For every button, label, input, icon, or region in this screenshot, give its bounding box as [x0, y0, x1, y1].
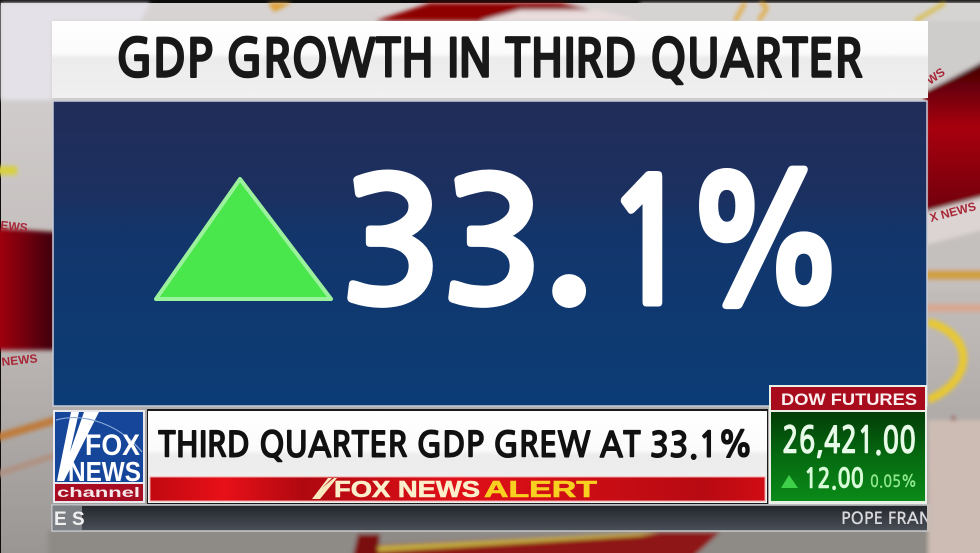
studio signage [0, 65, 978, 369]
banner headline: THIRD QUARTER GDP GREW AT 33.1% [158, 429, 753, 463]
fox news channel logo: channel [57, 484, 140, 500]
headline figure: 3 [339, 159, 445, 330]
fox news channel logo: NEWS [68, 456, 141, 487]
studio signage: WS [924, 65, 948, 87]
dow values: 26,421.00 [782, 422, 916, 459]
fox news alert strip [150, 476, 765, 502]
dow values [771, 412, 925, 501]
title panel [52, 21, 928, 98]
dow values: 12.00 [804, 466, 864, 493]
main blue panel [53, 101, 927, 406]
title text: GDP GROWTH IN THIRD QUARTER [116, 32, 863, 85]
dow values: 0.05% [870, 473, 917, 490]
dow futures box [769, 385, 927, 504]
dow heading: DOW FUTURES [781, 390, 917, 409]
studio signage: NEWS [1, 351, 38, 369]
fox news alert strip: ALERT [484, 476, 597, 502]
headline figure: 3 [440, 159, 546, 330]
news ticker [52, 505, 933, 531]
headline figure: % [684, 159, 847, 330]
news ticker: POPE FRAN [841, 510, 931, 527]
studio signage: X NEWS [928, 199, 978, 225]
headline figure [339, 120, 847, 351]
lower third banner [147, 409, 768, 504]
fox news channel logo: FOX [85, 429, 140, 462]
dow heading [771, 387, 925, 410]
headline figure: 1 [603, 159, 695, 330]
news ticker: E S [54, 509, 85, 530]
icon: green up triangle [156, 179, 331, 299]
fox news channel logo [53, 410, 145, 503]
studio signage: EWS [0, 218, 28, 235]
fox news alert strip: FOX NEWS [334, 476, 480, 502]
headline figure: . [543, 120, 595, 351]
